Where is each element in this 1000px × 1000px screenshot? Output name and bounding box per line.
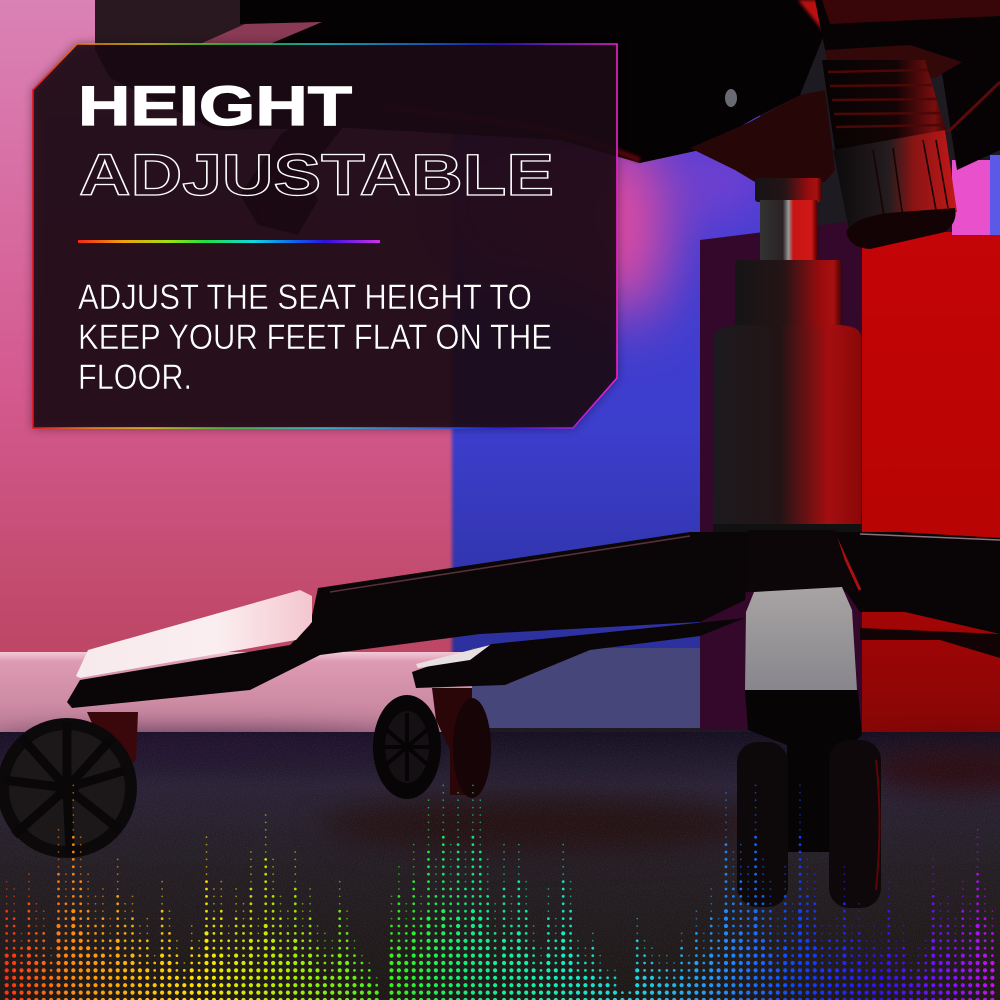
fork bbox=[745, 690, 862, 852]
red wall panel bbox=[860, 232, 1000, 735]
panel fill bbox=[33, 44, 617, 428]
pink wall bbox=[0, 0, 452, 660]
upper right frame bbox=[815, 0, 1000, 170]
heading: adjustable outline: ADJUSTABLE bbox=[79, 143, 554, 208]
pink window highlight bbox=[952, 160, 990, 235]
red highlight at seat corner bbox=[798, 0, 826, 32]
rainbow divider bbox=[78, 240, 380, 243]
left wheel bbox=[737, 742, 788, 907]
rear base arm bbox=[412, 618, 745, 688]
gas lift post bbox=[713, 178, 861, 532]
ribbed shaft bbox=[822, 60, 947, 150]
panel: height adjustable bbox=[33, 44, 617, 428]
right base arm bbox=[830, 532, 1000, 658]
panel shadow bbox=[33, 44, 617, 428]
heading: height: HEIGHT bbox=[78, 74, 352, 137]
body text: ADJUST THE SEAT HEIGHT TO bbox=[78, 278, 532, 317]
small dots layer bbox=[7, 780, 992, 1000]
white arm cap bbox=[76, 590, 312, 678]
grip end bbox=[846, 208, 956, 249]
baseboard left bbox=[0, 652, 472, 736]
carpet bbox=[0, 732, 1000, 1000]
grey cap bbox=[745, 587, 857, 690]
rear caster bbox=[373, 688, 491, 799]
carpet shadows bbox=[0, 735, 1000, 853]
panel rainbow border bbox=[33, 44, 617, 428]
knob flange bbox=[825, 45, 962, 80]
seat side band bbox=[95, 0, 322, 44]
front caster bbox=[737, 587, 881, 908]
dark shadow panel bbox=[700, 222, 862, 730]
carpet grain bbox=[0, 732, 1000, 1000]
equalizer dots bbox=[7, 780, 992, 1000]
left base arm bbox=[67, 532, 750, 708]
chrome rod bbox=[760, 200, 817, 260]
body text: KEEP YOUR FEET FLAT ON THE bbox=[78, 318, 552, 357]
grip bbox=[833, 130, 957, 235]
height lever knob bbox=[822, 45, 962, 249]
body text bbox=[78, 278, 552, 397]
seat mechanism bracket bbox=[690, 90, 835, 182]
pink seat highlight bbox=[200, 22, 322, 44]
chair seat underside bbox=[95, 0, 1000, 182]
large dots layer bbox=[7, 908, 992, 1000]
baseboard right bbox=[472, 648, 700, 728]
right wheel bbox=[829, 740, 881, 908]
body text: FLOOR. bbox=[78, 358, 192, 397]
collar bbox=[755, 178, 822, 202]
magenta and violet glow on wall bbox=[571, 151, 760, 354]
blue wall bbox=[440, 100, 760, 655]
lower sleeve bbox=[713, 325, 861, 528]
screw bbox=[725, 89, 737, 107]
red rim lights bbox=[380, 106, 640, 160]
medium dots layer bbox=[7, 835, 992, 1000]
upper sleeve bbox=[735, 260, 842, 327]
seat lever bbox=[240, 110, 345, 235]
left caster bbox=[0, 712, 138, 858]
center hub bbox=[745, 530, 855, 592]
